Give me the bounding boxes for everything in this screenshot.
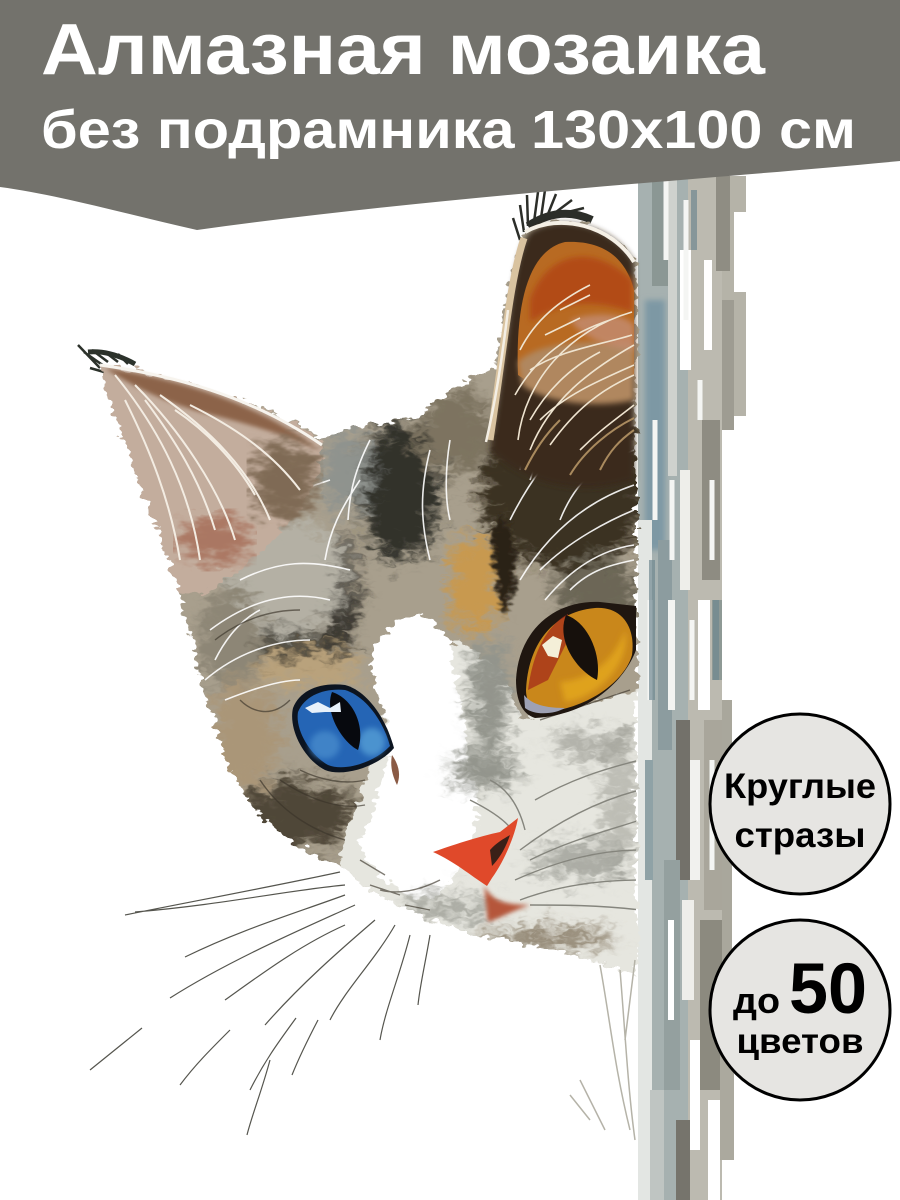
cat right eye [516, 602, 636, 718]
badge: up to 50 colours: 50 [789, 950, 867, 1029]
header banner [0, 0, 900, 230]
fur patches [198, 390, 650, 849]
grey muzzle shading [400, 637, 638, 948]
badge: round rhinestones: стразы [734, 816, 866, 855]
cat left ear tuft [78, 345, 135, 372]
cat whiskers [90, 872, 430, 1135]
illustration: cat [78, 190, 650, 1140]
cat white muzzle [340, 615, 640, 980]
title [41, 10, 856, 160]
title: Алмазная мозаика [41, 10, 766, 90]
cat right ear tuft [513, 190, 592, 240]
badge: up to 50 colours: до [733, 980, 780, 1021]
cat right ear [486, 223, 634, 488]
subtitle: без подрамника 130х100 см [41, 100, 856, 160]
badge: round rhinestones: Круглые [724, 767, 876, 806]
badge: round rhinestones [710, 714, 890, 894]
cat left eye [292, 684, 394, 772]
forehead blaze [447, 535, 503, 635]
wall [638, 176, 748, 1200]
cat left ear [100, 365, 322, 594]
badge: up to 50 colours [710, 920, 890, 1100]
badge: up to 50 colours: цветов [736, 1022, 864, 1061]
cat nose [433, 818, 530, 922]
cat fur strokes [205, 320, 640, 910]
head base [80, 210, 650, 990]
tear duct [391, 755, 399, 785]
